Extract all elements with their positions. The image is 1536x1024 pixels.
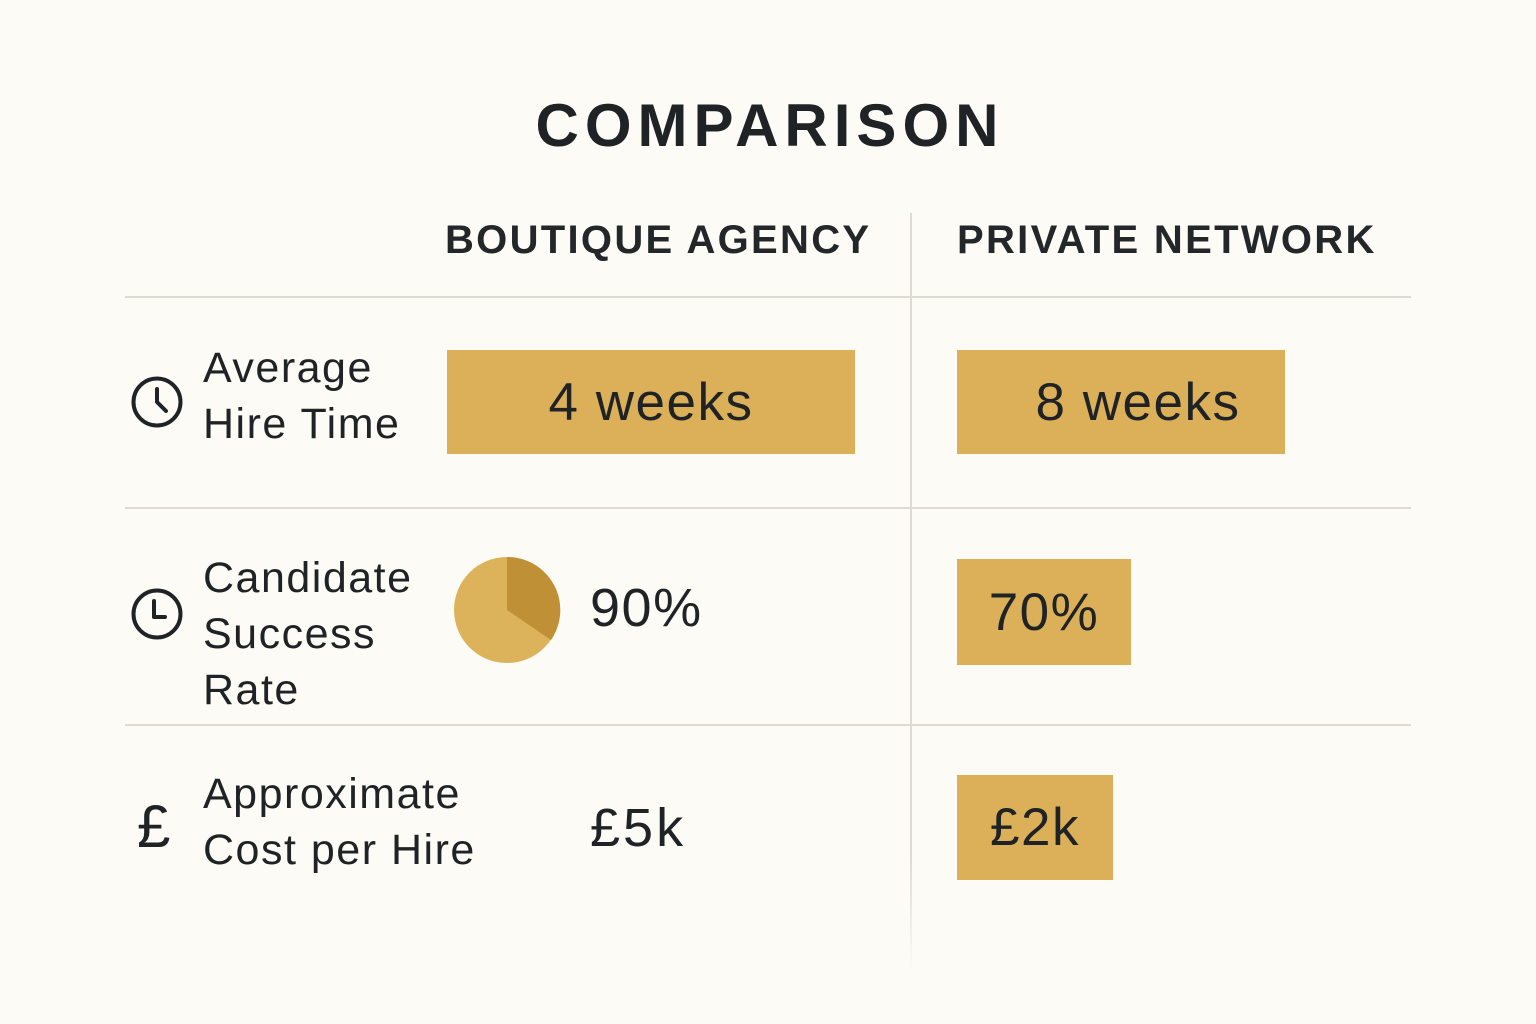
title: COMPARISON bbox=[536, 92, 1004, 159]
row 3: approximate cost per hire bbox=[137, 770, 1113, 880]
value box: £2k bbox=[957, 775, 1113, 880]
value box: 8 weeks: 8 weeks bbox=[1036, 372, 1240, 432]
pie chart bbox=[454, 557, 560, 663]
column header: boutique agency: BOUTIQUE AGENCY bbox=[445, 218, 871, 262]
value box: 4 weeks bbox=[447, 350, 855, 454]
label bbox=[203, 770, 476, 874]
column header: private network: PRIVATE NETWORK bbox=[957, 218, 1377, 262]
label: Cost per Hire bbox=[203, 826, 476, 874]
value box: 4 weeks: 4 weeks bbox=[549, 372, 753, 432]
row 2: candidate success rate bbox=[132, 554, 1131, 714]
label: Rate bbox=[203, 666, 300, 714]
value: £5k: £5k bbox=[590, 798, 686, 858]
value box: 70%: 70% bbox=[989, 582, 1099, 642]
label: Hire Time bbox=[203, 400, 400, 448]
value box: 70% bbox=[957, 559, 1131, 665]
value box: 8 weeks bbox=[957, 350, 1285, 454]
row 1: average hire time bbox=[132, 344, 1285, 454]
label: Average bbox=[203, 344, 373, 392]
label bbox=[203, 554, 413, 714]
value: 90%: 90% bbox=[590, 578, 703, 638]
label bbox=[203, 344, 400, 448]
icon: pound: £ bbox=[137, 793, 172, 860]
label: Success bbox=[203, 610, 376, 658]
label: Candidate bbox=[203, 554, 413, 602]
icon: clock bbox=[132, 376, 182, 428]
icon: clock bbox=[132, 588, 182, 640]
value box: £2k: £2k bbox=[990, 798, 1080, 857]
label: Approximate bbox=[203, 770, 461, 818]
